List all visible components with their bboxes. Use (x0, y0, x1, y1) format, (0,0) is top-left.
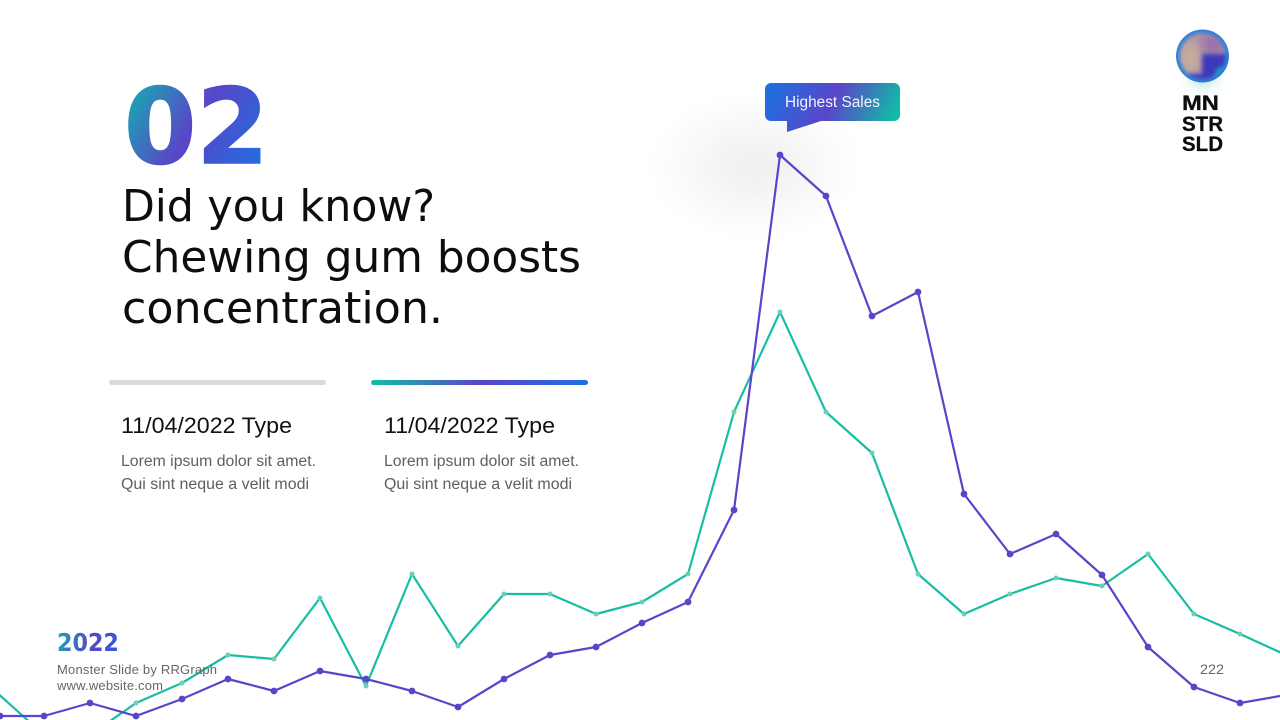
column 2 body (384, 453, 579, 493)
column 1 body (121, 453, 316, 493)
big section number: 02 (124, 66, 269, 188)
logo wordmark: STR (1182, 113, 1223, 136)
line chart (0, 152, 1280, 720)
column 1 (109, 380, 326, 493)
teal data series (0, 310, 1280, 720)
headline: Chewing gum boosts (122, 232, 581, 283)
footer credits: www.website.com (56, 678, 163, 693)
gradient divider bar (371, 380, 588, 385)
page number: 222 (1200, 661, 1224, 677)
headline: concentration. (122, 283, 443, 334)
grey divider bar (109, 380, 326, 385)
column 2 heading: 11/04/2022 Type (384, 413, 555, 438)
footer credits (56, 662, 217, 693)
footer year: 2022 (57, 628, 119, 657)
column 2 body: Qui sint neque a velit modi (384, 476, 572, 493)
headline: Did you know? (122, 181, 435, 232)
logo wordmark: MN (1182, 92, 1219, 115)
footer credits: Monster Slide by RRGraph (57, 662, 217, 677)
callout: highest sales (765, 83, 900, 132)
callout: highest sales: Highest Sales (785, 94, 880, 111)
logo wordmark (1182, 92, 1223, 156)
logo wordmark: SLD (1182, 133, 1223, 156)
column 1 body: Qui sint neque a velit modi (121, 476, 309, 493)
purple data series (0, 152, 1280, 719)
soft glow behind chart peak (647, 90, 863, 242)
column 2 body: Lorem ipsum dolor sit amet. (384, 453, 579, 470)
icon: gradient sphere (1176, 30, 1229, 92)
column 1 heading: 11/04/2022 Type (121, 413, 292, 438)
headline (122, 181, 581, 334)
column 1 body: Lorem ipsum dolor sit amet. (121, 453, 316, 470)
footer (56, 628, 217, 693)
column 2 (371, 380, 588, 493)
logo (1176, 30, 1229, 152)
